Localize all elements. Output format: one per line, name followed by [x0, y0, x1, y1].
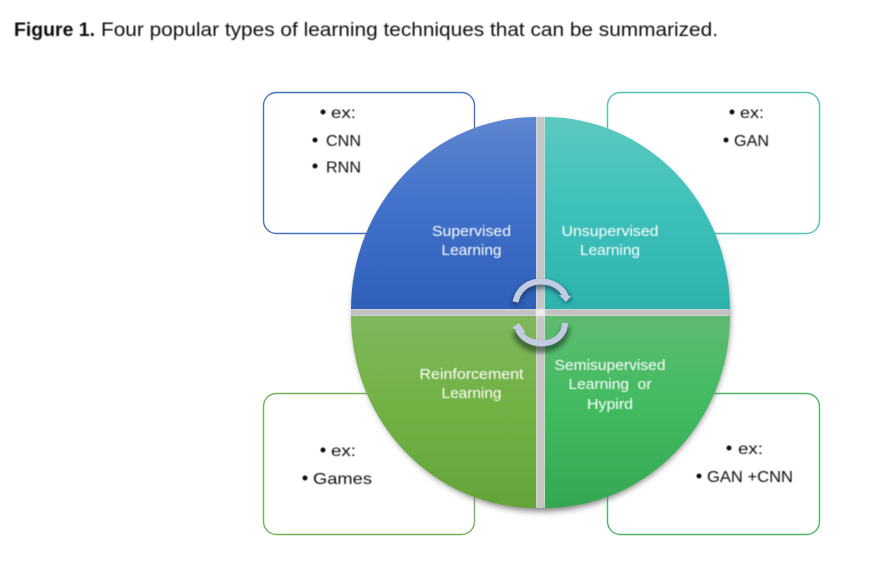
quadrant: unsupervised learning: Unsupervised	[562, 223, 658, 240]
title: Four popular types of learning techniques that can be summarized.	[101, 20, 718, 41]
quadrant: supervised learning: Learning	[442, 242, 502, 259]
quadrant: reinforcement learning: Learning	[442, 385, 502, 402]
panel: supervised examples: ex:	[331, 105, 356, 122]
quadrant: unsupervised learning: Learning	[580, 242, 640, 259]
circle shadow	[346, 112, 736, 514]
panel: supervised examples: CNN	[326, 133, 361, 150]
quadrant: reinforcement learning	[351, 316, 536, 508]
panel: reinforcement examples	[264, 394, 474, 534]
icon: cycle arrow top	[515, 281, 571, 305]
quadrant: semisupervised learning or hybrid: Hypird	[587, 396, 633, 413]
quadrant: semisupervised learning or hybrid: Learning or	[568, 376, 652, 393]
panel: reinforcement examples: ex:	[331, 443, 356, 460]
quadrant: reinforcement learning: Reinforcement	[420, 366, 524, 383]
quadrant: semisupervised learning or hybrid	[545, 316, 730, 508]
panel: semisupervised examples: GAN +CNN	[707, 469, 793, 486]
panel: unsupervised examples	[608, 92, 820, 234]
panel: reinforcement examples: Games	[313, 471, 372, 488]
panel: semisupervised examples	[608, 394, 820, 534]
panel: semisupervised examples: ex:	[738, 441, 763, 458]
panel: supervised examples: RNN	[326, 160, 361, 176]
panel: supervised examples	[264, 92, 474, 234]
quadrant: semisupervised learning or hybrid: Semisupervised	[554, 357, 666, 374]
title: Figure 1.	[14, 20, 95, 41]
quadrant: supervised learning	[351, 117, 536, 309]
panel: unsupervised examples: GAN	[734, 133, 769, 150]
icon: cycle arrow bottom	[512, 323, 566, 349]
panel: unsupervised examples: ex:	[740, 105, 764, 122]
quadrant: supervised learning: Supervised	[432, 223, 511, 240]
quadrant: unsupervised learning	[545, 117, 730, 309]
